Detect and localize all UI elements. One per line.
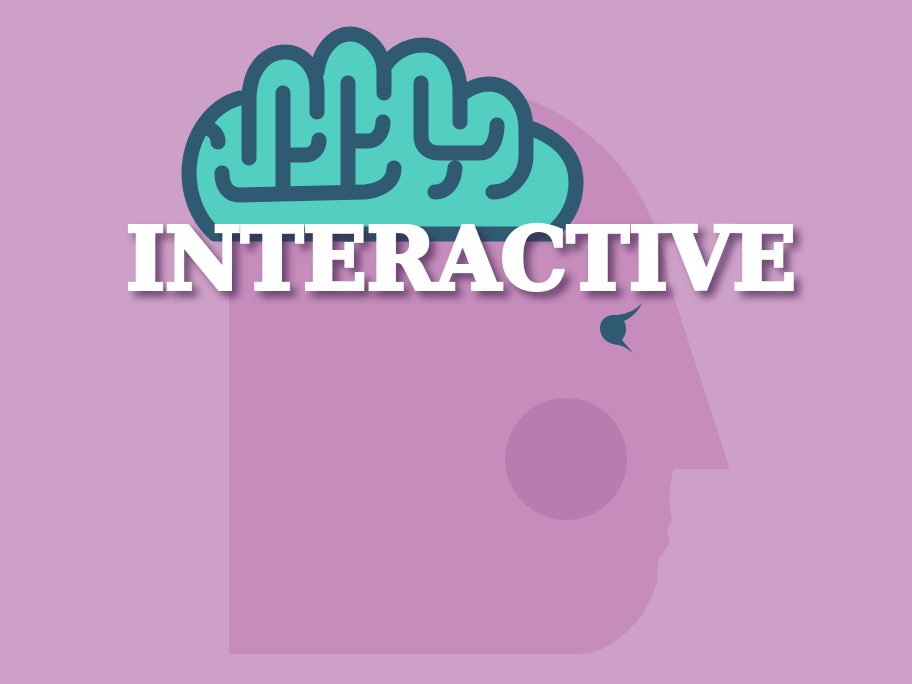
right fold: [421, 83, 497, 153]
short fold: [435, 168, 455, 192]
vertical fold 2: [340, 83, 356, 185]
eye mark: [600, 303, 642, 353]
lower U fold: [222, 168, 394, 195]
cheek circle: [505, 398, 627, 520]
left fold: [203, 127, 218, 142]
title: INTERACTIVE: [126, 209, 796, 310]
brain fill: [189, 34, 576, 234]
outer outline: [189, 98, 240, 234]
branch 2: [357, 122, 383, 141]
vertical fold 1: [276, 93, 290, 185]
branch 1: [290, 140, 319, 155]
brain outline and folds: [189, 34, 576, 234]
head silhouette: [229, 90, 730, 654]
brain: [189, 34, 576, 234]
